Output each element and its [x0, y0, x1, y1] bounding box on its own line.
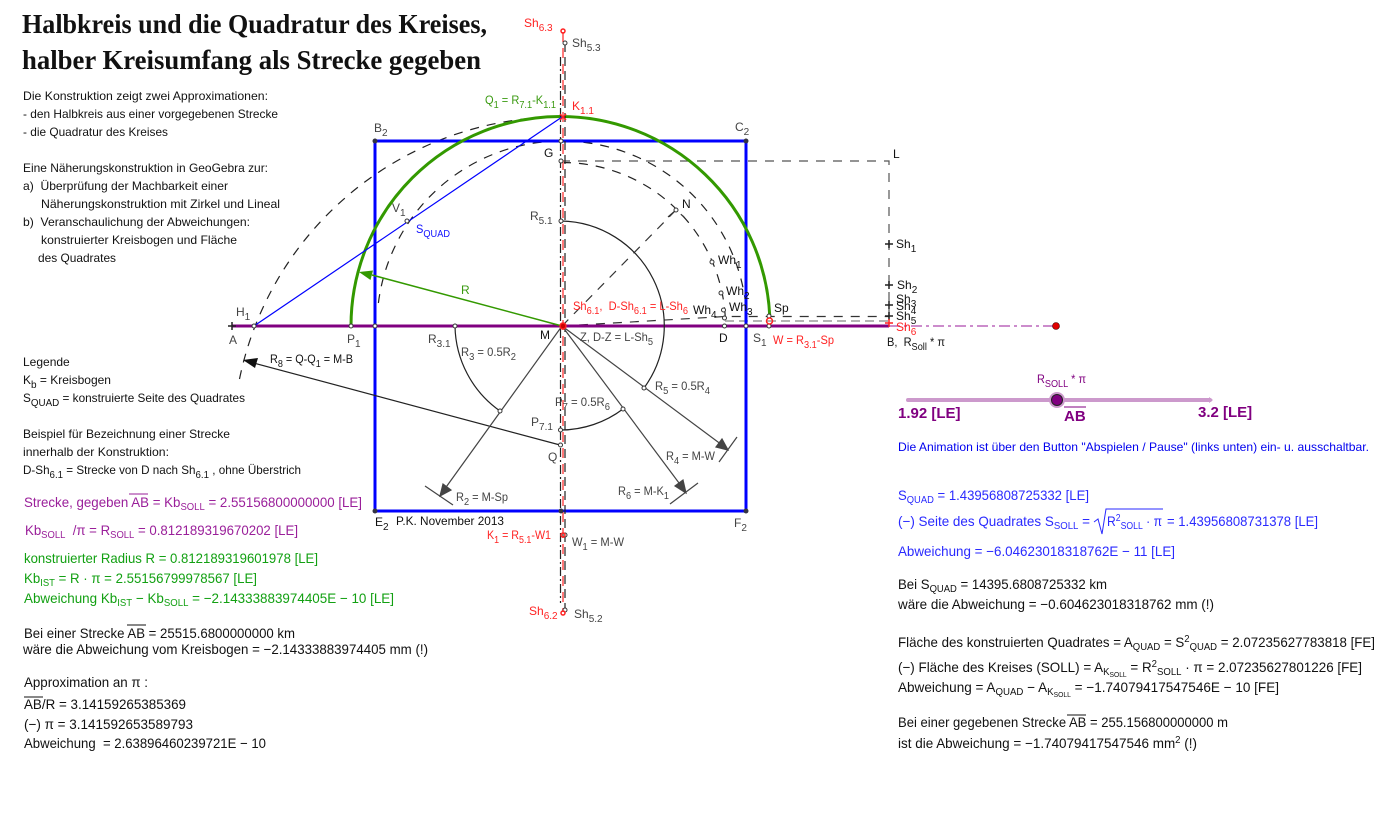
vertical axes [560, 32, 565, 612]
blue values: square side: = 1.43956808731378 [LE] [1167, 513, 1318, 529]
label: A: A [229, 333, 237, 347]
text block: areas: − A [1023, 679, 1048, 695]
label: B2: B [374, 121, 382, 135]
label: B, RSoll: Soll [912, 342, 927, 353]
label: N: N [682, 197, 691, 211]
label: Wh4: 4 [711, 310, 717, 321]
label: Sh6: 6 [911, 327, 917, 338]
segment: SQUAD blue line [254, 117, 562, 326]
text block: naming example: Beispiel für Bezeichnung einer Strecke [23, 427, 230, 441]
text block: approximation of pi: Approximation an π : [24, 674, 148, 690]
purple values: given segment: Strecke, gegeben AB = Kb [24, 494, 189, 510]
label: R3.1: 3.1 [437, 339, 451, 350]
label: R8: = M-B [321, 352, 353, 366]
label: R3: R [461, 345, 470, 359]
text block: introduction: - die Quadratur des Kreises [23, 125, 168, 139]
dashed arc: radius M-B around Q [240, 117, 562, 379]
label: Wh1: 1 [736, 260, 742, 271]
label: SQUAD: S [416, 222, 424, 236]
text block: legend [23, 355, 245, 409]
label: R6: = M-K [631, 484, 664, 498]
text block: areas: SOLL [1054, 692, 1071, 699]
text block: naming example: 6.1 [196, 470, 209, 481]
green values: constructed radius: Abweichung Kb [24, 590, 121, 606]
text block: approximation of pi: (−) π = 3.141592653589793 [24, 716, 193, 732]
text block: areas: = R [1127, 659, 1152, 675]
text block: areas: SOLL [1157, 667, 1182, 678]
construction points [252, 41, 771, 612]
slider: AB: R [1037, 372, 1046, 386]
label: H1: 1 [245, 312, 251, 323]
text block: introduction: a) Überprüfung der Machbarkeit einer [23, 179, 228, 193]
green values: constructed radius: IST [117, 598, 132, 609]
label: Wh3: 3 [747, 307, 753, 318]
text block: legend: = konstruierte Seite des Quadrates [59, 391, 245, 405]
text block: areas: SOLL [1110, 672, 1127, 679]
slider: AB: SOLL [1045, 379, 1069, 390]
blue values: square side: S [898, 487, 907, 503]
label: Sh3: Sh [896, 292, 911, 306]
purple values: given segment [24, 494, 362, 541]
label: Sh6.1: 6.1 [634, 306, 647, 317]
text block: areas: · π = 2.07235627801226 [FE] [1182, 659, 1362, 675]
label: Q1: = R [499, 93, 520, 107]
label: B, RSoll: * π [927, 335, 945, 349]
label: R8: R [270, 352, 279, 366]
label: E2: 2 [383, 522, 389, 533]
text block: deviation for segment in km: wäre die Abweichung vom Kreisbogen = −2.14333883974405 mm (!) [22, 641, 428, 657]
square: blue [375, 141, 746, 511]
slider: AB: 1.92 [LE] [898, 405, 961, 422]
arrow: R4 [562, 326, 737, 462]
arrow: R2 [425, 326, 562, 505]
text block: areas: K [1103, 667, 1110, 678]
label: R2: R [456, 490, 465, 504]
purple values: given segment: SOLL [41, 530, 66, 541]
text block: area deviation in mm2: (!) [1181, 735, 1197, 751]
blue values: square side [898, 487, 1318, 559]
label: Sh4: 4 [911, 306, 917, 317]
label: K1.1: 1.1 [580, 106, 594, 117]
label: R8: = Q-Q [283, 352, 316, 366]
label: V1: 1 [400, 208, 406, 219]
label: R3.1: R [428, 332, 437, 346]
label: R5.1: 5.1 [539, 216, 553, 227]
label: R4: R [666, 449, 675, 463]
label: R5: 4 [705, 386, 710, 397]
label: K1.1: K [572, 99, 580, 113]
green values: constructed radius: Kb [24, 570, 41, 586]
label: F2: 2 [741, 523, 747, 534]
label: R5: = 0.5R [668, 379, 705, 393]
label: Wh2: Wh [726, 284, 744, 298]
text block: legend: QUAD [31, 398, 59, 409]
text block: areas: = S [1160, 634, 1184, 650]
text block: deviation for segment in km [22, 625, 428, 657]
label: G: G [544, 146, 553, 160]
text block: areas: QUAD [995, 687, 1023, 698]
label: author: P.K. November 2013 [396, 514, 504, 528]
purple values: given segment: SOLL [110, 530, 135, 541]
label: S1: S [753, 331, 761, 345]
label: P1: 1 [355, 339, 361, 350]
text block: introduction: Näherungskonstruktion mit Zirkel und Lineal [41, 197, 280, 211]
text block: areas: = 2.07235627783818 [FE] [1217, 634, 1375, 650]
green values: constructed radius: IST [40, 578, 55, 589]
label: R8: 8 [278, 359, 283, 370]
label: L: L [893, 147, 900, 161]
dashed arc: radius through G [378, 141, 745, 303]
label: Sh5.2: Sh [574, 607, 589, 621]
geometric construction diagram [228, 29, 1060, 615]
label: Sh6.1: = L-Sh [647, 299, 683, 313]
label: P7: = 0.5R [568, 395, 605, 409]
green values: constructed radius: SOLL [164, 598, 189, 609]
slider: AB: * π [1068, 372, 1086, 386]
text block: naming example: 6.1 [50, 470, 63, 481]
arrow: R8 from Q [243, 358, 560, 445]
label: W1: 1 [583, 542, 588, 553]
text block: area deviation in mm2: 2 [1175, 735, 1181, 746]
label: P7: P [555, 395, 563, 409]
label: Wh3: Wh [729, 300, 747, 314]
slider: AB [898, 372, 1252, 425]
text block: area deviation in mm2: ist die Abweichung = −1.74079417547546 mm [898, 735, 1186, 751]
label: C2: 2 [744, 127, 750, 138]
label: R4: = M-W [679, 449, 716, 463]
label: Q1: -K [532, 93, 543, 107]
blue values: square side: (−) Seite des Quadrates S [898, 513, 1060, 529]
blue values: square side: R [1107, 513, 1117, 529]
text block: areas: QUAD [1133, 642, 1160, 653]
diagram labels [229, 16, 945, 625]
label: R3: = 0.5R [474, 345, 511, 359]
label: K1: 1 [494, 535, 499, 546]
label: Q1: 1.1 [543, 100, 556, 111]
purple values: given segment: Kb [25, 522, 42, 538]
label: R6: 1 [664, 491, 669, 502]
text block: square deviation in km [897, 576, 1214, 612]
label: K1: = R [499, 528, 519, 542]
text block: naming example [23, 427, 301, 481]
text block: approximation of pi: AB/R = 3.14159265385369 [24, 696, 186, 712]
label: K1: -W1 [531, 528, 551, 542]
label: M: M [540, 328, 550, 342]
green values: constructed radius: = R · π = 2.55156799978567 [LE] [55, 570, 257, 586]
label: Sh5: Sh [896, 309, 911, 323]
text block: approximation of pi: Abweichung = 2.63896460239721E − 10 [24, 735, 266, 751]
label: Sh6.1: Sh [573, 299, 588, 313]
label: W1: W [572, 535, 583, 549]
text block: legend: K [23, 373, 31, 387]
label: Z: Z, D-Z = L-Sh [580, 330, 653, 344]
text block: introduction: Die Konstruktion zeigt zwei Approximationen: [23, 89, 268, 103]
title: halber Kreisumfang als Strecke gegeben [22, 45, 481, 75]
text block: areas: = −1.74079417547546E − 10 [FE] [1071, 679, 1279, 695]
label: Wh4: Wh [693, 303, 711, 317]
green values: constructed radius: konstruierter Radius R = 0.812189319601978 [LE] [24, 550, 318, 566]
blue values: square side: 2 [1116, 513, 1121, 524]
label: Sh5.3: Sh [572, 36, 587, 50]
label: H1: H [236, 305, 245, 319]
title [22, 9, 487, 75]
label: Sh6.1: 6 [683, 306, 688, 317]
purple values: given segment: = 0.812189319670202 [LE] [134, 522, 298, 538]
text block: legend: S [23, 391, 31, 405]
text block: introduction: des Quadrates [38, 251, 116, 265]
label: P7.1: P [531, 415, 539, 429]
label: W: -Sp [817, 333, 834, 347]
label: R8: 1 [316, 359, 321, 370]
label: P7: 6 [605, 402, 610, 413]
label: B, RSoll: B, R [887, 335, 914, 349]
text block: area deviation in mm2: Bei einer gegebenen Strecke AB = 255.156800000000 m [898, 714, 1228, 730]
text block: naming example: D-Sh [23, 463, 50, 477]
label: Wh2: 2 [744, 291, 750, 302]
endpoint red dot [1052, 322, 1060, 330]
label: Sh6.3: Sh [524, 16, 539, 30]
label: R4: 4 [674, 456, 680, 467]
label: Sp: Sp [774, 301, 789, 315]
label: Z: 5 [648, 337, 653, 348]
text block: areas: Fläche des konstruierten Quadrates = A [898, 634, 1145, 650]
label: Q1: 7.1 [519, 100, 533, 111]
blue values: square side: SOLL [1121, 521, 1143, 532]
text block: areas [898, 634, 1375, 699]
text block: areas: 2 [1184, 634, 1190, 645]
label: Q1: 1 [494, 100, 499, 111]
label: R2: = M-Sp [469, 490, 508, 504]
text block: areas: 2 [1152, 659, 1157, 670]
purple values: given segment: /π = R [65, 522, 110, 538]
blue values: square side: QUAD [907, 495, 934, 506]
label: P7.1: 7.1 [539, 422, 553, 433]
label: Sh6.2: 6.2 [544, 611, 558, 622]
label: S1: 1 [761, 338, 767, 349]
green values: constructed radius: = −2.14333883974405E − 10 [LE] [188, 590, 394, 606]
label: Sh6.1: , D-Sh [599, 299, 634, 313]
text block: introduction: konstruierter Kreisbogen und Fläche [41, 233, 237, 247]
green values: constructed radius [24, 550, 394, 609]
label: SQUAD: QUAD [423, 229, 450, 240]
label: C2: C [735, 120, 744, 134]
label: R2: 2 [464, 497, 469, 508]
text block: square deviation in km: QUAD [930, 584, 957, 595]
label: R: R [461, 283, 470, 297]
text block: introduction [23, 89, 280, 265]
label: Q: Q [548, 450, 557, 464]
text block: legend: Legende [23, 355, 70, 369]
label: Sh6: Sh [896, 320, 911, 334]
text block: square deviation in km: Bei S [898, 576, 931, 592]
text block: naming example: innerhalb der Konstruktion: [23, 445, 169, 459]
label: D: D [719, 331, 728, 345]
text block: introduction: b) Veranschaulichung der Abweichungen: [23, 215, 250, 229]
label: Sh1: Sh [896, 237, 911, 251]
label: Sh2: Sh [897, 278, 912, 292]
text block: areas: (−) Fläche des Kreises (SOLL) = A [898, 659, 1112, 675]
semicircle: green arc [351, 116, 770, 326]
label: W: W = R [773, 333, 807, 347]
text block: square deviation in km: = 14395.6808725332 km [957, 576, 1107, 592]
label: W1: = M-W [588, 535, 625, 549]
label: P1: P [347, 332, 355, 346]
blue values: square side: = 1.43956808725332 [LE] [934, 487, 1089, 503]
text block: areas: QUAD [1190, 642, 1217, 653]
green values: constructed radius: − Kb [132, 590, 164, 606]
label: R3: 3 [469, 352, 475, 363]
text block: areas: K [1047, 687, 1054, 698]
blue values: square side: Abweichung = −6.04623018318762E − 11 [LE] [898, 543, 1175, 559]
text block: introduction: - den Halbkreis aus einer vorgegebenen Strecke [23, 107, 278, 121]
text block: square deviation in km: wäre die Abweichung = −0.604623018318762 mm (!) [897, 596, 1214, 612]
baseline: A to B purple [232, 324, 1056, 328]
label: Sh6.3: 6.3 [539, 23, 553, 34]
purple values: given segment: = 2.55156800000000 [LE] [205, 494, 362, 510]
label: Sh5: 5 [911, 316, 917, 327]
arcs: half radii [455, 221, 664, 430]
label: Sh3: 3 [911, 299, 917, 310]
label: Sh6.1: 6.1 [587, 306, 600, 317]
text block: introduction: Eine Näherungskonstruktion in GeoGebra zur: [23, 161, 268, 175]
purple values: given segment: SOLL [180, 502, 205, 513]
text block: naming example: , ohne Überstrich [209, 463, 301, 477]
label: W: 3.1 [804, 340, 817, 351]
text block: area deviation in mm2 [898, 714, 1228, 751]
label: P7: 7 [563, 402, 568, 413]
red points [560, 29, 772, 615]
label: Q1: Q [485, 93, 494, 107]
text block: legend: = Kreisbogen [37, 373, 111, 387]
label: R3: 2 [511, 352, 516, 363]
dashed lines: G to L and L to B [561, 161, 889, 326]
label: Sh5.3: 5.3 [587, 43, 601, 54]
animation note: Die Animation ist über den Button "Abspielen / Pause" (links unten) ein- u. ausschaltbar. [898, 440, 1369, 454]
label: Sh4: Sh [896, 299, 911, 313]
label: Sh6.2: Sh [529, 604, 544, 618]
slider: AB: AB [1064, 408, 1086, 425]
label: Wh1: Wh [718, 253, 736, 267]
label: R6: 6 [626, 491, 631, 502]
label: B2: 2 [382, 128, 388, 139]
label: K1: 5.1 [519, 535, 532, 546]
title: Halbkreis und die Quadratur des Kreises, [22, 9, 487, 39]
label: F2: F [734, 516, 741, 530]
label: Sh5.2: 5.2 [589, 614, 603, 625]
tick marks: A and Sh points [228, 240, 893, 330]
blue values: square side: · π [1143, 513, 1162, 529]
dashed line: M to N [562, 210, 684, 326]
label: E2: E [375, 515, 383, 529]
label: V1: V [392, 201, 400, 215]
arrow: radius R green [359, 270, 562, 326]
dashed arc: radius through N and D [562, 162, 725, 318]
label: Sh1: 1 [911, 244, 917, 255]
text block: legend: b [31, 380, 37, 391]
text block: approximation of pi [24, 674, 266, 751]
text block: areas: Abweichung = A [898, 679, 999, 695]
label: R5: 5 [663, 386, 669, 397]
square corners [372, 138, 748, 514]
dashed lines: M to Sh4 and Sh5 [562, 316, 889, 326]
label: R5.1: R [530, 209, 539, 223]
label: R5: R [655, 379, 664, 393]
slider: AB: 3.2 [LE] [1198, 404, 1252, 421]
arrow: R6 [562, 326, 698, 504]
label: K1: K [487, 528, 495, 542]
text block: deviation for segment in km: Bei einer Strecke AB = 25515.6800000000 km [24, 625, 295, 641]
label: Sh2: 2 [912, 285, 918, 296]
blue values: square side: SOLL [1054, 521, 1079, 532]
label: R6: R [618, 484, 627, 498]
text block: naming example: = Strecke von D nach Sh [63, 463, 196, 477]
blue values: square side: = [1078, 513, 1090, 529]
